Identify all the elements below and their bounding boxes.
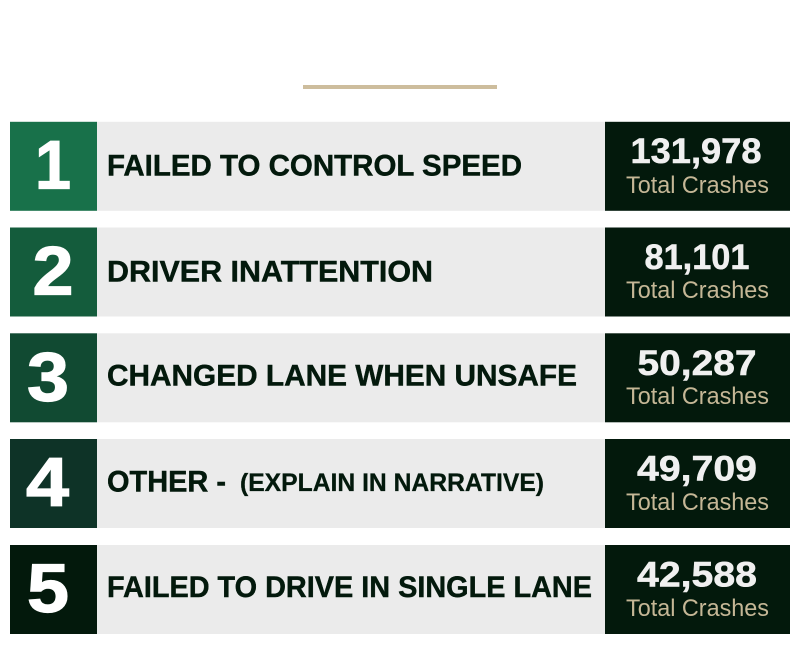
row 5: failed to drive in single lane [10,545,790,634]
rank badge 5 [10,545,97,634]
rank badge 5: 5 [27,550,69,627]
stat 4: 49,709 [637,450,757,488]
stat 1: Total Crashes [626,172,769,199]
label 4 note: (EXPLAIN IN NARRATIVE) [240,469,544,497]
label 2: DRIVER INATTENTION [107,256,433,288]
stat 2: Total Crashes [626,277,769,304]
rank badge 4 [10,439,97,528]
row 3: changed lane when unsafe [10,333,790,422]
rank badge 1 [10,122,97,211]
label 4: OTHER - [107,466,226,498]
stat 3 [605,333,790,422]
stat 3: 50,287 [638,344,756,383]
stat 3: Total Crashes [626,383,769,410]
rank badge 4: 4 [26,444,69,520]
stat 4: Total Crashes [626,489,769,516]
stat 2 [605,228,790,316]
label 1: FAILED TO CONTROL SPEED [107,150,522,182]
tan accent divider [303,85,497,89]
rank badge 2 [10,228,97,316]
rank badge 2: 2 [32,232,74,310]
row 4: other [10,439,790,528]
label 5: FAILED TO DRIVE IN SINGLE LANE [107,571,592,604]
stat 4 [605,439,790,528]
label 3: CHANGED LANE WHEN UNSAFE [107,360,577,392]
rank badge 3 [10,333,97,422]
rank badge 1: 1 [35,126,71,204]
stat 2: 81,101 [644,238,750,277]
stat 1 [605,122,790,211]
stat 1: 131,978 [630,132,762,171]
stat 5 [605,545,790,634]
row 2: driver inattention [10,228,790,316]
row 1: failed to control speed [10,122,790,211]
rank badge 3: 3 [27,338,69,416]
stat 5: 42,588 [637,556,757,594]
stat 5: Total Crashes [626,595,769,622]
